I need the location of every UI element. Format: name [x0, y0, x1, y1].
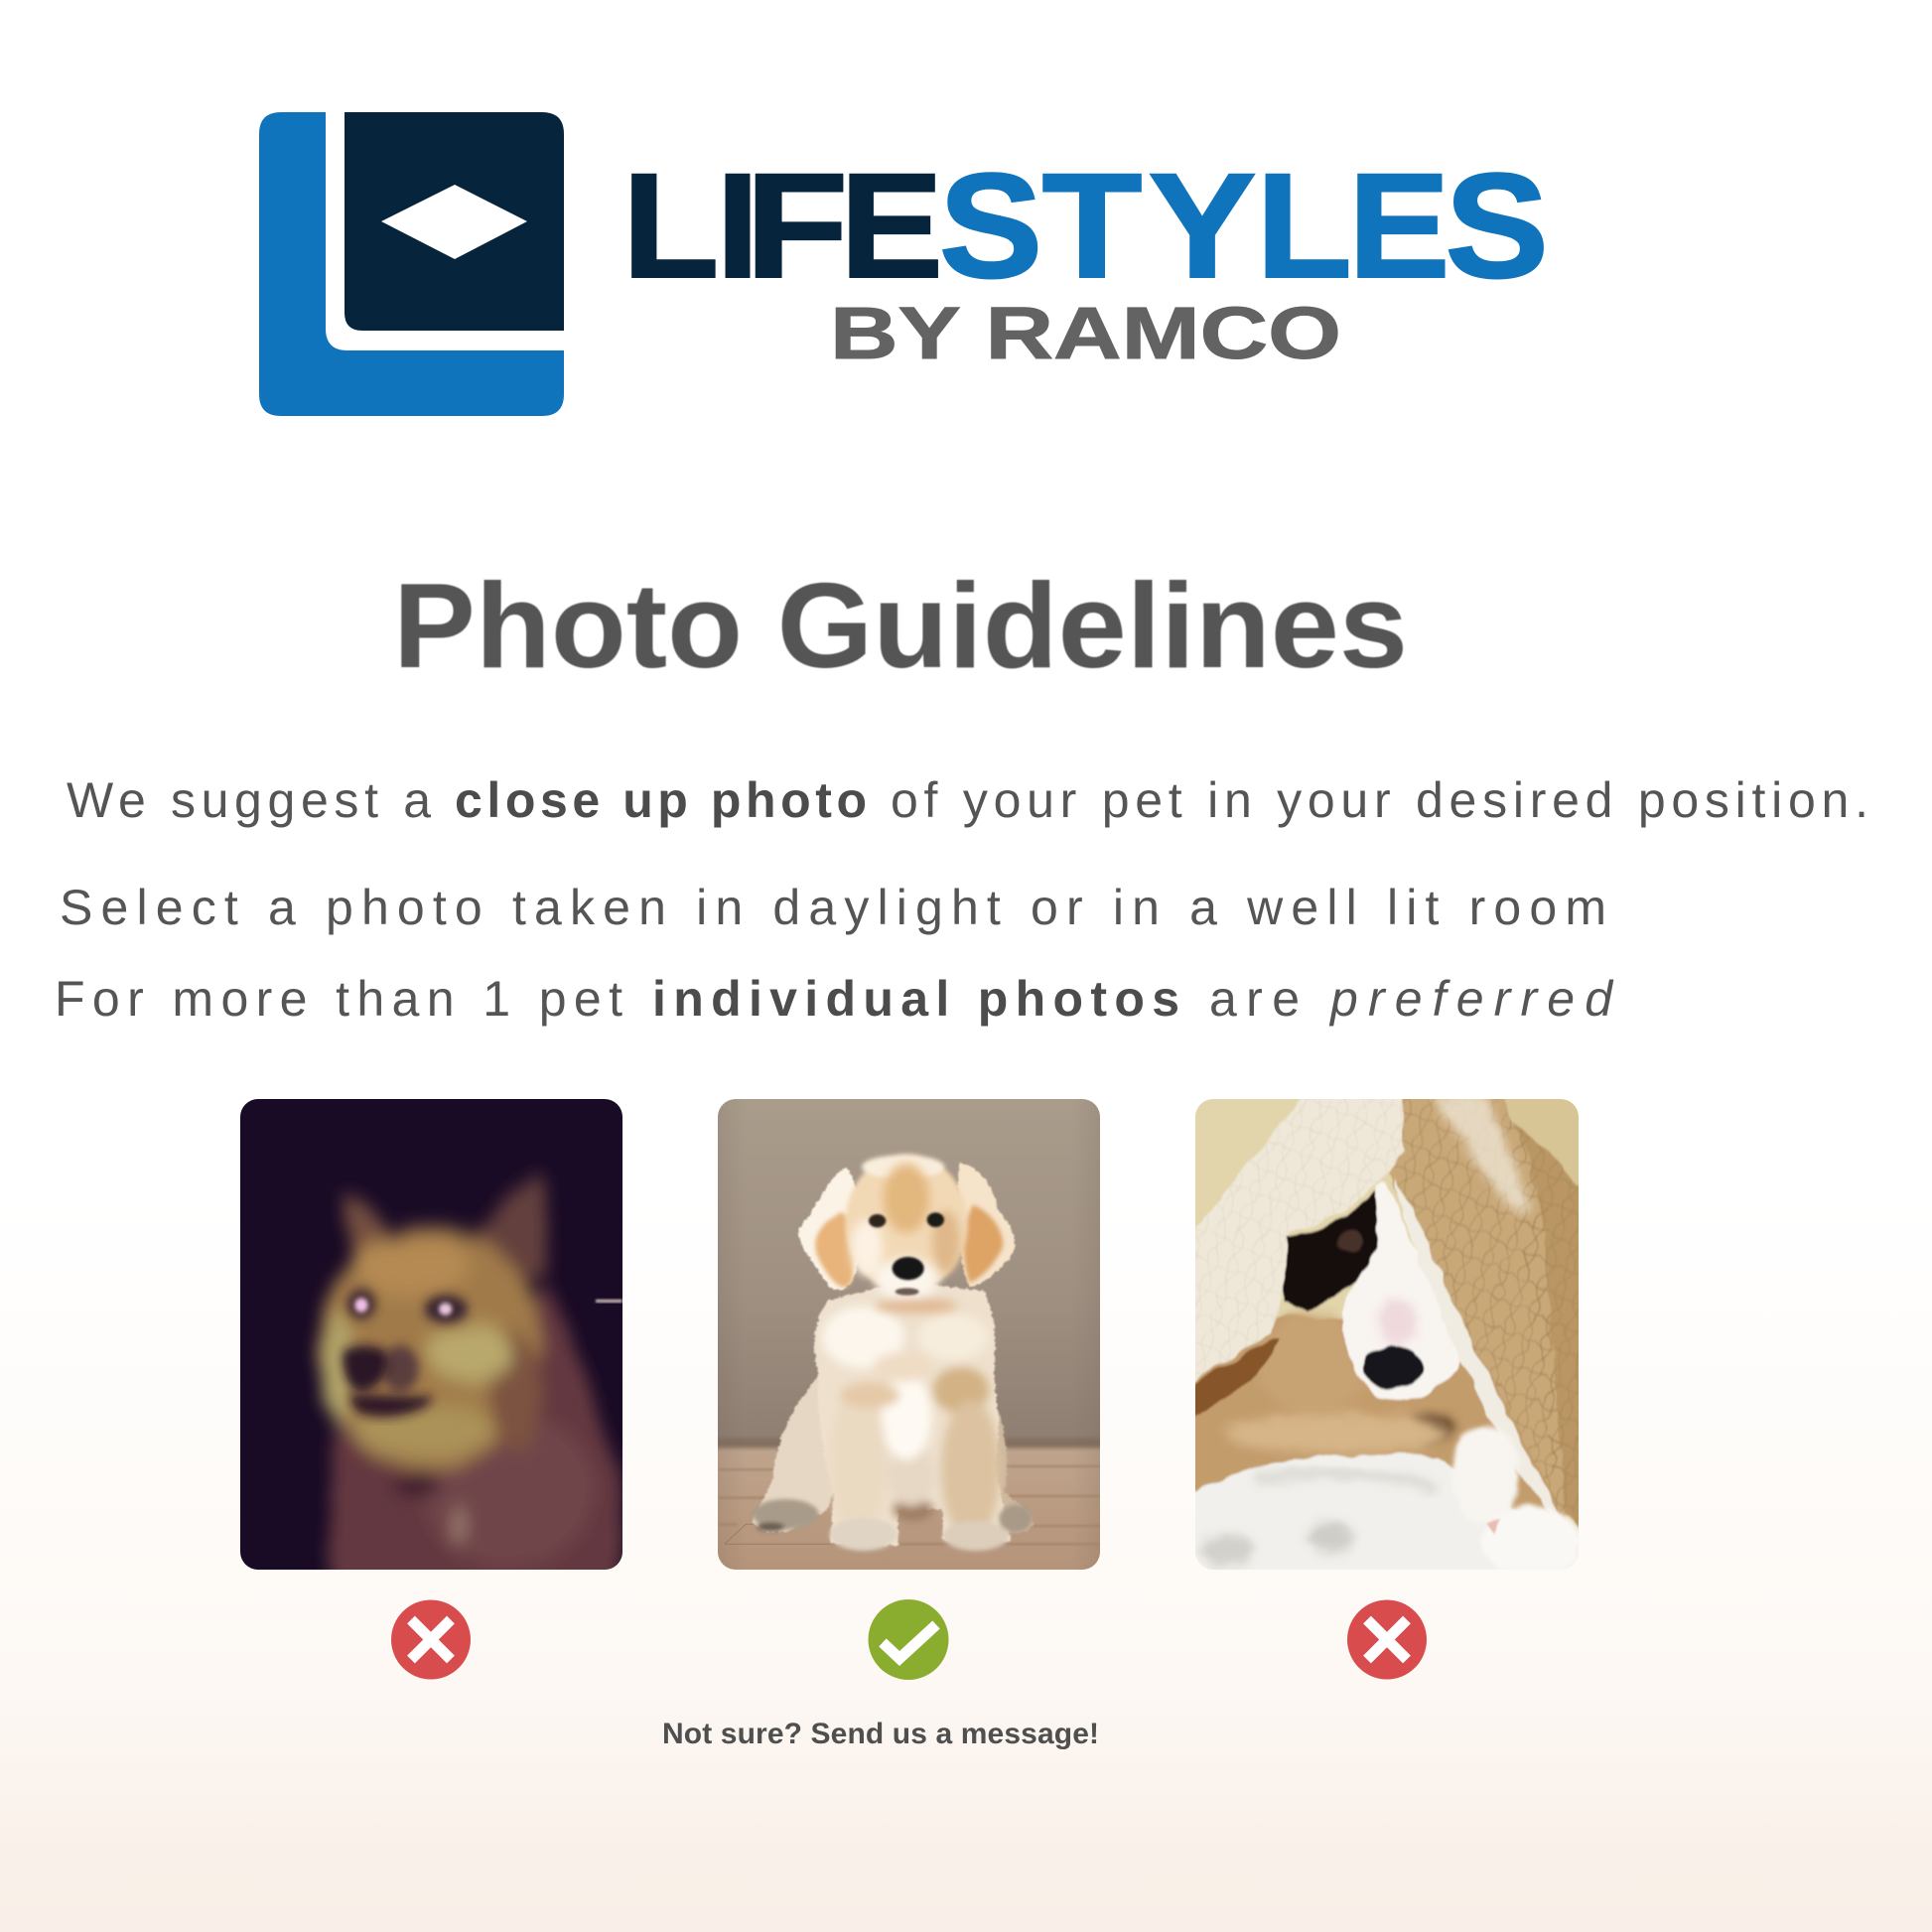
icon: red cross, left [391, 1600, 471, 1680]
photo: dark blurry dog (bad example) [240, 1099, 622, 1570]
line 3: individual photos [652, 971, 1179, 1027]
logo wordmark: LIFESTYLES: Y [1148, 142, 1257, 309]
logo wordmark: LIFESTYLES: T [1042, 142, 1142, 309]
line 3: preferred [1328, 971, 1614, 1027]
line 3: For more than 1 pet [55, 971, 622, 1027]
line 2: Select a photo taken in daylight or in a well lit room [60, 880, 1606, 935]
photo: golden retriever puppy (good example) [715, 1096, 1103, 1574]
logo [259, 112, 1549, 416]
icon: green check [868, 1599, 949, 1680]
photo: dog hiding under blanket (bad example) [1195, 1099, 1579, 1570]
line 3: are [1209, 971, 1300, 1027]
line 1: of your pet in your desired position. [891, 772, 1868, 828]
line 1: close up photo [455, 772, 867, 828]
logo wordmark: LIFESTYLES: E [1348, 142, 1449, 309]
line 1 [67, 772, 1868, 828]
text block: guidance [55, 772, 1868, 1027]
logo wordmark: LIFESTYLES: E [840, 142, 943, 309]
logo wordmark: LIFESTYLES: S [1446, 142, 1549, 309]
logo wordmark: LIFESTYLES: S [939, 142, 1042, 309]
logo wordmark: LIFESTYLES: F [745, 142, 848, 309]
logo wordmark: LIFESTYLES: I [716, 142, 759, 309]
logo tagline: BY RAMCO: BY RAMCO [830, 292, 1341, 374]
line 1: We suggest a [67, 772, 431, 828]
logo wordmark: LIFESTYLES: L [1256, 142, 1352, 309]
icon: red cross, right [1347, 1600, 1427, 1680]
title: Photo Guidelines [393, 558, 1408, 693]
logo wordmark: LIFESTYLES: L [621, 142, 719, 309]
icon: logo mark [259, 112, 564, 416]
line 3 [55, 971, 1614, 1027]
caption: Not sure? Send us a message! [662, 1718, 1099, 1750]
